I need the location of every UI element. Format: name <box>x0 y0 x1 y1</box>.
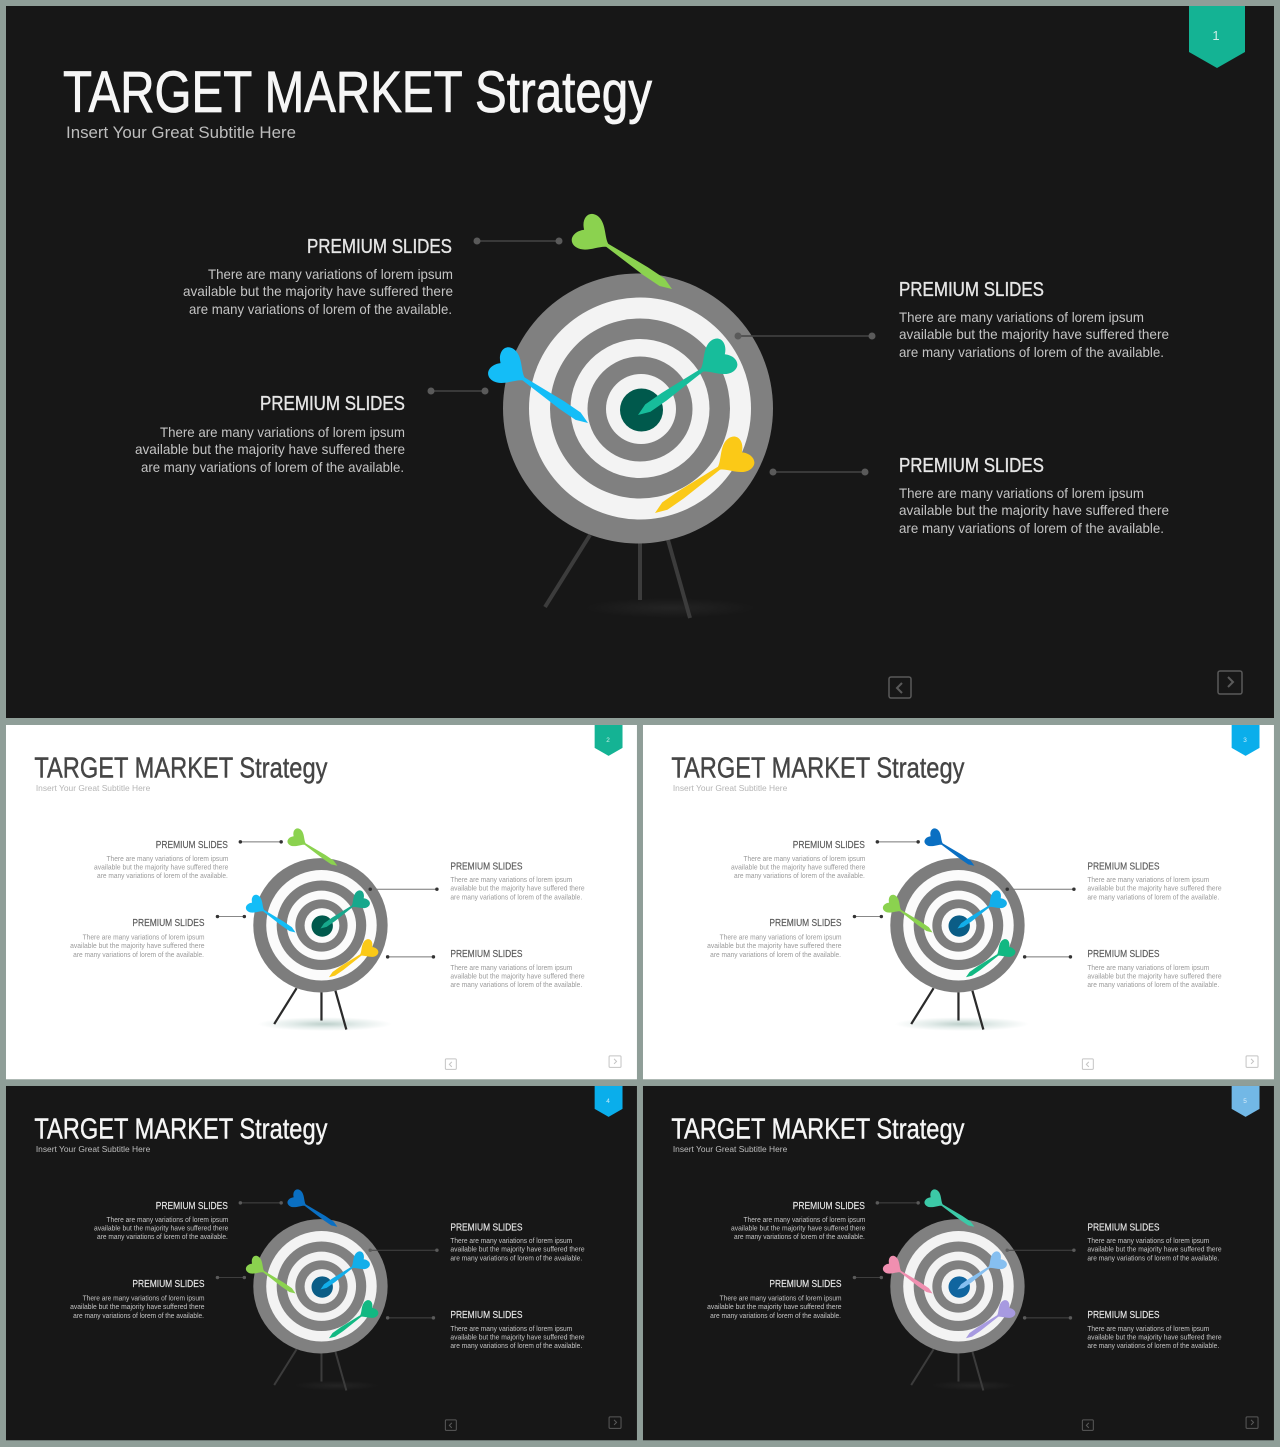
text block top left: There are many variations of lorem ipsum <box>744 1217 866 1224</box>
text block lower right: are many variations of lorem of the available. <box>450 982 582 989</box>
text block lower right: available but the majority have suffered there <box>450 973 585 980</box>
text block lower right: There are many variations of lorem ipsum <box>1087 965 1209 972</box>
text block top right <box>899 279 1169 360</box>
connector mid left <box>216 915 246 918</box>
connector top right <box>368 1248 439 1252</box>
subtitle: Insert Your Great Subtitle Here <box>673 783 788 793</box>
subtitle: Insert Your Great Subtitle Here <box>36 1144 151 1154</box>
title: TARGET MARKET Strategy <box>63 60 652 125</box>
target board <box>253 1219 388 1353</box>
dart: teal <box>315 889 371 936</box>
dart: blue <box>485 344 599 439</box>
text block top left: PREMIUM SLIDES <box>793 840 865 851</box>
nav next <box>1246 1056 1258 1067</box>
page tab: 1 <box>1212 28 1220 43</box>
text block top left <box>94 840 229 880</box>
text block top left: available but the majority have suffered there <box>94 1225 229 1232</box>
text block top right: There are many variations of lorem ipsum <box>1087 877 1209 884</box>
text block top right: PREMIUM SLIDES <box>1087 1222 1160 1233</box>
text block mid left: There are many variations of lorem ipsum <box>83 1295 205 1302</box>
text block mid left <box>135 393 405 475</box>
connector mid left <box>216 1276 246 1279</box>
target stand legs and shadow <box>895 988 1029 1031</box>
text block lower right: are many variations of lorem of the available. <box>1087 982 1219 989</box>
text block top left <box>94 1201 229 1241</box>
dart: dark blue <box>286 1188 343 1235</box>
text block lower right <box>899 455 1169 536</box>
connector top left <box>474 238 562 244</box>
text block top left: available but the majority have suffered there <box>94 864 229 871</box>
text block top left <box>183 236 453 317</box>
target stand legs and shadow <box>274 1349 379 1391</box>
text block lower right: PREMIUM SLIDES <box>1087 1310 1160 1321</box>
target board <box>890 858 1025 992</box>
dart: emerald <box>961 938 1017 985</box>
text block lower right: are many variations of lorem of the available. <box>450 1343 582 1350</box>
text block lower right: are many variations of lorem of the available. <box>1087 1343 1219 1350</box>
text block top left: available but the majority have suffered there <box>731 864 866 871</box>
dart: yellow <box>324 938 380 985</box>
text block lower right: There are many variations of lorem ipsum <box>899 485 1144 501</box>
panel: white slide 3 <box>643 725 1274 1079</box>
target board <box>253 858 388 992</box>
title: TARGET MARKET Strategy <box>34 753 328 785</box>
text block lower right: available but the majority have suffered there <box>899 502 1169 518</box>
nav previous <box>1082 1420 1093 1430</box>
text block mid left: are many variations of lorem of the available. <box>710 952 841 959</box>
text block lower right: PREMIUM SLIDES <box>1087 949 1160 960</box>
text block mid left: are many variations of lorem of the available. <box>73 952 204 959</box>
text block lower right: available but the majority have suffered there <box>1087 1334 1222 1341</box>
text block top left <box>731 840 866 880</box>
text block top left: available but the majority have suffered there <box>731 1225 866 1232</box>
dart: green <box>286 827 343 874</box>
text block top right: PREMIUM SLIDES <box>450 1222 523 1233</box>
target stand legs and shadow <box>545 535 755 618</box>
text block top right: available but the majority have suffered there <box>450 1247 585 1254</box>
page tab <box>595 1086 623 1117</box>
text block lower right <box>1087 1310 1222 1350</box>
page tab: 2 <box>606 737 610 744</box>
dart: blue <box>244 893 301 940</box>
text block mid left <box>70 918 205 959</box>
text block top right: are many variations of lorem of the available. <box>450 1256 582 1263</box>
text block top right: are many variations of lorem of the available. <box>1087 895 1219 902</box>
text block top right <box>450 1222 585 1263</box>
target stand legs and shadow <box>911 1349 1016 1391</box>
text block top left: are many variations of lorem of the available. <box>189 301 452 317</box>
text block lower right <box>1087 949 1222 989</box>
text block top right: There are many variations of lorem ipsum <box>899 309 1144 325</box>
text block top right: There are many variations of lorem ipsum <box>450 877 572 884</box>
text block top left: are many variations of lorem of the available. <box>734 1234 865 1241</box>
connector mid left <box>428 388 488 394</box>
dart: light blue <box>952 1250 1008 1297</box>
dart: light green <box>244 1254 301 1301</box>
text block lower right: are many variations of lorem of the available. <box>899 520 1164 536</box>
dart: teal <box>627 335 740 431</box>
text block mid left: PREMIUM SLIDES <box>132 1279 205 1290</box>
connector lower right <box>386 955 435 959</box>
page tab <box>595 725 623 756</box>
title: TARGET MARKET Strategy <box>34 1114 328 1146</box>
nav next <box>1246 1417 1258 1428</box>
nav previous <box>445 1420 456 1430</box>
text block top right: are many variations of lorem of the available. <box>1087 1256 1219 1263</box>
dart: dark blue <box>923 827 980 874</box>
nav next <box>609 1417 621 1428</box>
connector top left <box>876 1201 920 1205</box>
panel: main dark slide 1 <box>6 6 1274 718</box>
text block top left: PREMIUM SLIDES <box>156 1201 228 1212</box>
nav next <box>1218 671 1242 694</box>
text block mid left: available but the majority have suffered there <box>707 1304 842 1311</box>
text block lower right: There are many variations of lorem ipsum <box>450 965 572 972</box>
text block mid left: available but the majority have suffered there <box>70 1304 205 1311</box>
dart: sky blue <box>952 889 1008 936</box>
text block top right: There are many variations of lorem ipsum <box>1087 1238 1209 1245</box>
target board <box>503 274 773 544</box>
text block mid left: PREMIUM SLIDES <box>260 393 405 415</box>
connector top right <box>734 332 876 340</box>
page tab <box>1232 1086 1260 1117</box>
text block top right: PREMIUM SLIDES <box>899 279 1044 301</box>
text block top left: PREMIUM SLIDES <box>156 840 228 851</box>
text block top right: available but the majority have suffered there <box>899 326 1169 342</box>
text block mid left: PREMIUM SLIDES <box>132 918 205 929</box>
connector lower right <box>1023 955 1072 959</box>
text block lower right: PREMIUM SLIDES <box>450 1310 523 1321</box>
text block mid left: There are many variations of lorem ipsum <box>720 934 842 941</box>
text block lower right: PREMIUM SLIDES <box>450 949 523 960</box>
text block top left: are many variations of lorem of the available. <box>97 873 228 880</box>
page tab <box>1232 725 1260 756</box>
nav previous <box>889 677 911 698</box>
text block top left: PREMIUM SLIDES <box>793 1201 865 1212</box>
connector lower right <box>1023 1316 1072 1320</box>
text block top left <box>731 1201 866 1241</box>
text block top left: There are many variations of lorem ipsum <box>107 1217 229 1224</box>
text block top left: There are many variations of lorem ipsum <box>208 266 453 282</box>
text block top left: are many variations of lorem of the available. <box>734 873 865 880</box>
text block top right: are many variations of lorem of the available. <box>450 895 582 902</box>
connector top left <box>239 840 283 844</box>
text block lower right <box>450 949 585 989</box>
text block top left: available but the majority have suffered there <box>183 283 453 299</box>
nav previous <box>445 1059 456 1069</box>
text block top left: PREMIUM SLIDES <box>307 236 452 258</box>
connector top left <box>239 1201 283 1205</box>
connector lower right <box>770 468 868 476</box>
connector top right <box>368 887 439 891</box>
panel: dark slide 4 <box>6 1086 637 1440</box>
text block mid left: are many variations of lorem of the available. <box>710 1313 841 1320</box>
text block lower right: available but the majority have suffered there <box>1087 973 1222 980</box>
text block top right <box>1087 861 1222 902</box>
dart: light green <box>881 893 938 940</box>
subtitle: Insert Your Great Subtitle Here <box>36 783 151 793</box>
text block mid left: There are many variations of lorem ipsum <box>83 934 205 941</box>
text block mid left: are many variations of lorem of the available. <box>141 459 404 475</box>
page tab: 3 <box>1243 737 1247 744</box>
connector mid left <box>853 1276 883 1279</box>
text block lower right: available but the majority have suffered there <box>450 1334 585 1341</box>
panel: dark slide 5 <box>643 1086 1274 1440</box>
text block mid left <box>70 1279 205 1320</box>
text block top right: There are many variations of lorem ipsum <box>450 1238 572 1245</box>
dart: emerald <box>324 1299 380 1346</box>
text block top right: PREMIUM SLIDES <box>450 861 523 872</box>
subtitle: Insert Your Great Subtitle Here <box>673 1144 788 1154</box>
connector mid left <box>853 915 883 918</box>
subtitle: Insert Your Great Subtitle Here <box>66 123 296 142</box>
dart: yellow <box>644 433 757 529</box>
dart: teal <box>923 1188 980 1235</box>
text block lower right: PREMIUM SLIDES <box>899 455 1044 477</box>
text block lower right: There are many variations of lorem ipsum <box>1087 1326 1209 1333</box>
nav previous <box>1082 1059 1093 1069</box>
connector top left <box>876 840 920 844</box>
text block mid left: available but the majority have suffered there <box>135 441 405 457</box>
text block top right: are many variations of lorem of the available. <box>899 344 1164 360</box>
text block top right <box>1087 1222 1222 1263</box>
text block mid left: available but the majority have suffered there <box>70 943 205 950</box>
dart: green <box>569 211 683 305</box>
connector lower right <box>386 1316 435 1320</box>
text block mid left <box>707 1279 842 1320</box>
text block top right: PREMIUM SLIDES <box>1087 861 1160 872</box>
text block top right <box>450 861 585 902</box>
text block mid left: available but the majority have suffered there <box>707 943 842 950</box>
text block top left: are many variations of lorem of the available. <box>97 1234 228 1241</box>
text block mid left <box>707 918 842 959</box>
page tab: 4 <box>606 1098 610 1105</box>
target stand legs and shadow <box>258 988 392 1031</box>
dart: sky blue <box>315 1250 371 1297</box>
text block top left: There are many variations of lorem ipsum <box>744 856 866 863</box>
text block mid left: are many variations of lorem of the available. <box>73 1313 204 1320</box>
page tab: 5 <box>1243 1098 1247 1105</box>
connector top right <box>1005 1248 1076 1252</box>
text block top right: available but the majority have suffered there <box>1087 886 1222 893</box>
connector top right <box>1005 887 1076 891</box>
target board <box>890 1219 1025 1353</box>
panel: white slide 2 <box>6 725 637 1079</box>
text block lower right <box>450 1310 585 1350</box>
text block mid left: PREMIUM SLIDES <box>769 918 842 929</box>
text block top left: There are many variations of lorem ipsum <box>107 856 229 863</box>
dart: pink <box>881 1254 938 1301</box>
dart: lavender <box>961 1299 1017 1346</box>
page tab <box>1189 6 1245 68</box>
text block mid left: PREMIUM SLIDES <box>769 1279 842 1290</box>
text block mid left: There are many variations of lorem ipsum <box>720 1295 842 1302</box>
text block mid left: There are many variations of lorem ipsum <box>160 424 405 440</box>
text block lower right: There are many variations of lorem ipsum <box>450 1326 572 1333</box>
title: TARGET MARKET Strategy <box>671 753 965 785</box>
text block top right: available but the majority have suffered there <box>450 886 585 893</box>
title: TARGET MARKET Strategy <box>671 1114 965 1146</box>
nav next <box>609 1056 621 1067</box>
text block top right: available but the majority have suffered there <box>1087 1247 1222 1254</box>
